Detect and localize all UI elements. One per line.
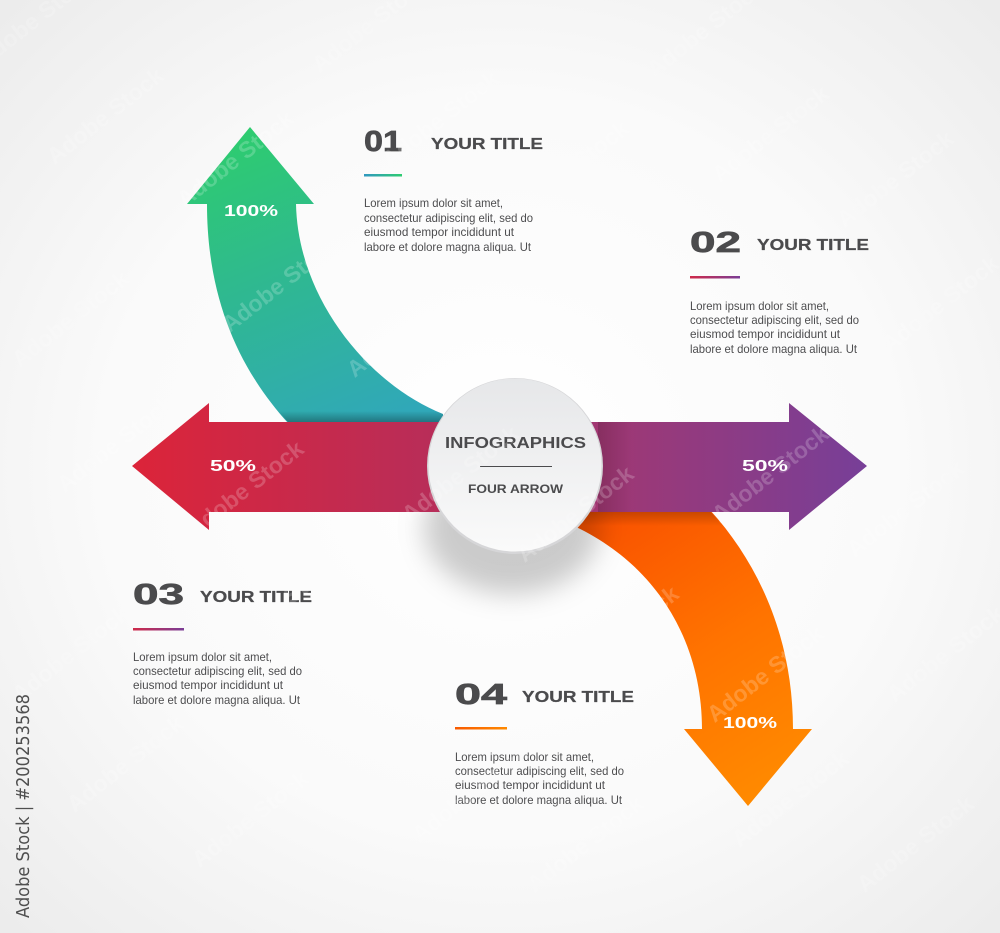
text block 04: 04 bbox=[455, 679, 507, 711]
watermark pattern: Adobe Stock bbox=[707, 80, 834, 187]
watermark pattern: Adobe Stock bbox=[172, 105, 299, 212]
text block 04 bbox=[455, 679, 634, 807]
text block 02: YOUR TITLE bbox=[757, 237, 869, 254]
watermark pattern: Adobe Stock bbox=[52, 390, 179, 497]
text block 04: consectetur adipiscing elit, sed do bbox=[455, 764, 624, 778]
text block 01: labore et dolore magna aliqua. Ut bbox=[364, 240, 532, 254]
watermark pattern: Adobe Stock bbox=[727, 745, 854, 852]
arrow: orange down 100% bbox=[578, 512, 812, 806]
text block 01: consectetur adipiscing elit, sed do bbox=[364, 211, 533, 225]
text block 01: eiusmod tempor incididunt ut bbox=[364, 225, 515, 239]
watermark pattern: Adobe Stock bbox=[547, 245, 674, 352]
watermark pattern: Adobe Stock bbox=[42, 62, 169, 169]
text block 02: 02 bbox=[690, 227, 741, 259]
arrow: green up 100%: 100% bbox=[224, 203, 278, 220]
text block 03: eiusmod tempor incididunt ut bbox=[133, 678, 284, 692]
watermark pattern: Adobe Stock bbox=[7, 600, 134, 707]
watermark pattern: Adobe Stock bbox=[397, 420, 524, 527]
text block 01: YOUR TITLE bbox=[431, 136, 543, 153]
watermark pattern: Adobe Stock bbox=[877, 250, 1000, 357]
text block 03: 03 bbox=[133, 579, 184, 611]
watermark pattern: Adobe Stock bbox=[377, 65, 504, 172]
text block 04: eiusmod tempor incididunt ut bbox=[455, 778, 606, 792]
text block 03 bbox=[133, 579, 312, 707]
arrow: green up 100% bbox=[187, 127, 450, 423]
text block 04: labore et dolore magna aliqua. Ut bbox=[455, 793, 623, 807]
text block 03: Lorem ipsum dolor sit amet, bbox=[133, 650, 272, 664]
text block 01 bbox=[364, 126, 543, 254]
arrow: orange down 100%: 100% bbox=[723, 715, 777, 732]
watermark pattern: Adobe Stock bbox=[557, 580, 684, 687]
watermark pattern: Adobe Stock bbox=[182, 435, 309, 542]
watermark pattern: Adobe Stock bbox=[707, 420, 834, 527]
text block 03: YOUR TITLE bbox=[200, 589, 312, 606]
text block 02: labore et dolore magna aliqua. Ut bbox=[690, 342, 858, 356]
center circle badge bbox=[427, 378, 603, 554]
watermark pattern: Adobe Stock bbox=[347, 600, 474, 707]
watermark pattern: Adobe Stock bbox=[62, 710, 189, 817]
watermark pattern: Adobe Stock bbox=[187, 765, 314, 872]
text block 02: Lorem ipsum dolor sit amet, bbox=[690, 299, 829, 313]
text block 01: Lorem ipsum dolor sit amet, bbox=[364, 196, 503, 210]
circle ground shadow bbox=[424, 462, 600, 594]
text block 01: 01 bbox=[364, 126, 402, 158]
watermark pattern: Adobe Stock bbox=[512, 460, 639, 567]
watermark pattern: Adobe Stock bbox=[407, 740, 534, 847]
center circle badge: INFOGRAPHICS bbox=[445, 435, 586, 452]
center circle badge: FOUR ARROW bbox=[468, 484, 563, 496]
watermark pattern: Adobe Stock bbox=[842, 455, 969, 562]
text block 04: Lorem ipsum dolor sit amet, bbox=[455, 750, 594, 764]
watermark pattern: Adobe Stock bbox=[217, 230, 344, 337]
text block 02: eiusmod tempor incididunt ut bbox=[690, 327, 841, 341]
watermark pattern: Adobe Stock bbox=[217, 550, 344, 657]
arrow: horizontal double red to purple 50% bbox=[132, 403, 867, 530]
watermark pattern: Adobe Stock bbox=[507, 115, 634, 222]
text block 03: consectetur adipiscing elit, sed do bbox=[133, 664, 302, 678]
arrow: horizontal double red to purple 50%: 50% bbox=[210, 458, 256, 475]
text block 02: consectetur adipiscing elit, sed do bbox=[690, 313, 859, 327]
text block 04: YOUR TITLE bbox=[522, 689, 634, 706]
watermark pattern: Adobe Stock bbox=[832, 125, 959, 232]
watermark pattern: Adobe Stock bbox=[342, 275, 469, 382]
watermark pattern: Adobe Stock bbox=[702, 620, 829, 727]
stock id caption: Adobe Stock | #200253568 bbox=[13, 694, 34, 918]
text block 02 bbox=[690, 227, 869, 356]
watermark pattern: Adobe Stock bbox=[852, 790, 979, 897]
text block 03: labore et dolore magna aliqua. Ut bbox=[133, 693, 301, 707]
arrow: horizontal double red to purple 50%: 50% bbox=[742, 458, 788, 475]
watermark pattern: Adobe Stock bbox=[522, 790, 649, 897]
watermark pattern: Adobe Stock bbox=[7, 265, 134, 372]
